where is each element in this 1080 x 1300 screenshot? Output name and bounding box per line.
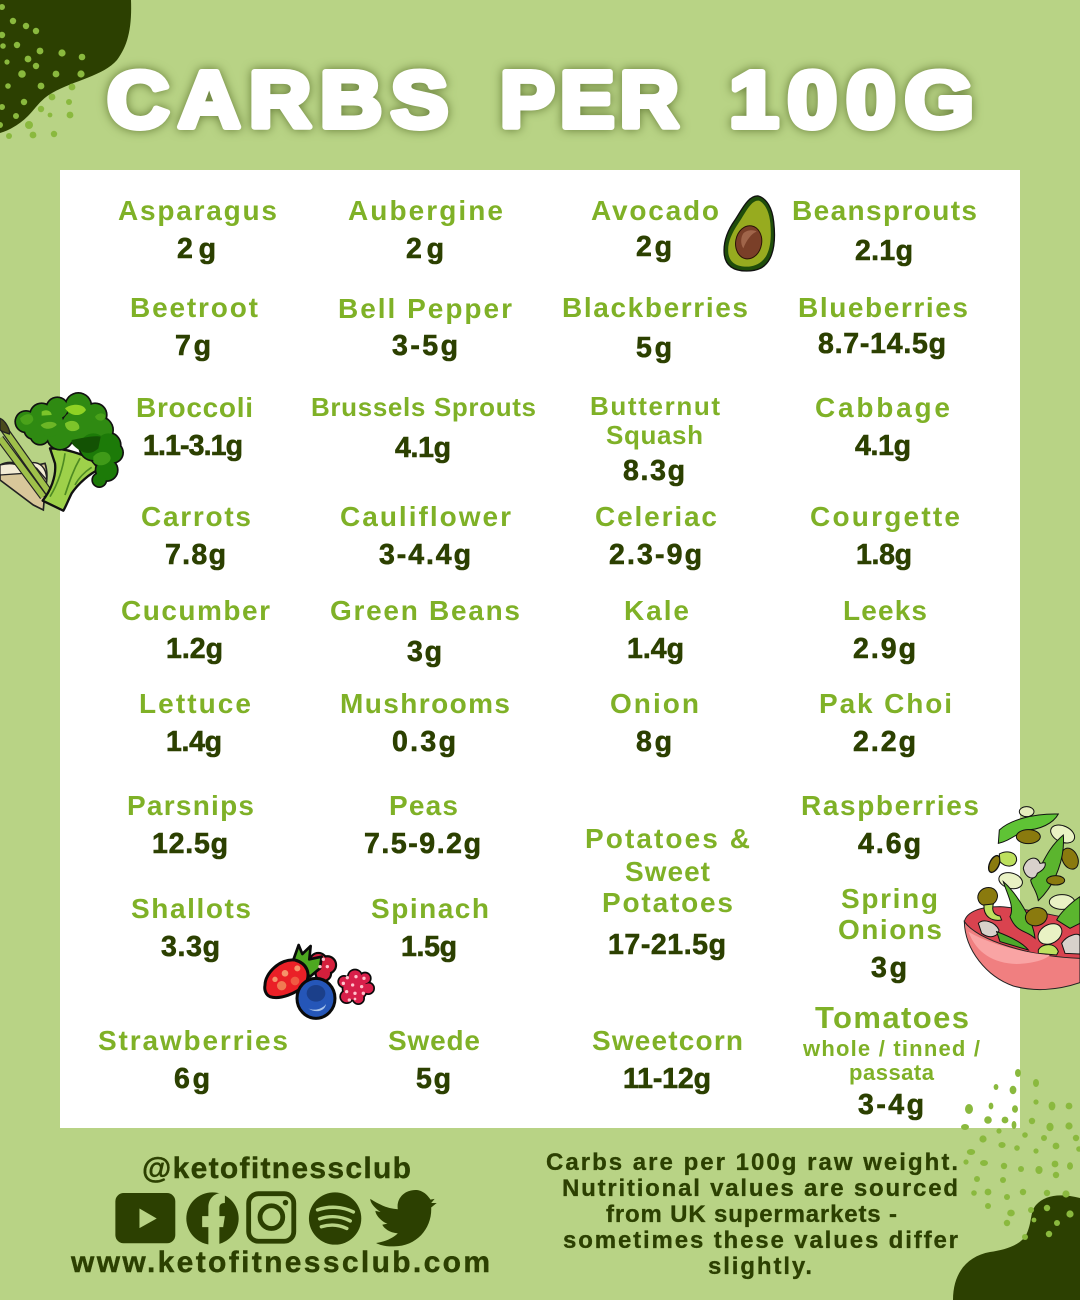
item: Bell Pepper bbox=[338, 293, 512, 362]
item: Swede: 5g bbox=[416, 1063, 451, 1095]
item: Pak Choi: Pak Choi bbox=[819, 688, 952, 719]
item: Celeriac: Celeriac bbox=[595, 501, 717, 532]
item: Beansprouts: 2.1g bbox=[855, 235, 913, 267]
note: source of values: slightly. bbox=[708, 1253, 812, 1280]
item: Brussels Sprouts: 4.1g bbox=[395, 432, 451, 464]
item: Kale: Kale bbox=[624, 595, 689, 626]
item: Lettuce: 1.4g bbox=[166, 726, 222, 758]
item: Bell Pepper: 3-5g bbox=[392, 330, 458, 362]
item: Kale: 1.4g bbox=[627, 633, 684, 665]
icon: broccoli with asparagus and mushrooms bbox=[0, 392, 124, 511]
item: Parsnips: 12.5g bbox=[152, 828, 228, 860]
icon: mixed berries bbox=[265, 945, 375, 1018]
item: Broccoli: Broccoli bbox=[136, 392, 253, 423]
item: Aubergine: 2g bbox=[406, 233, 444, 265]
item: Spring Onions: 3g bbox=[871, 952, 907, 984]
item: Cabbage: Cabbage bbox=[815, 392, 950, 423]
item: Avocado: Avocado bbox=[591, 195, 719, 226]
item: Avocado: 2g bbox=[636, 231, 672, 263]
item: Spring Onions: Spring bbox=[841, 883, 938, 914]
item: Sweetcorn: 11-12g bbox=[623, 1063, 711, 1095]
icon: facebook bbox=[186, 1192, 239, 1246]
item: Kale bbox=[624, 595, 689, 665]
item: Shallots bbox=[131, 893, 251, 963]
icon: avocado bbox=[724, 196, 774, 271]
item: Green Beans: Green Beans bbox=[330, 595, 520, 626]
item: Beetroot: 7g bbox=[175, 330, 211, 362]
item: Tomatoes: passata bbox=[849, 1060, 935, 1085]
item: Mushrooms: 0.3g bbox=[392, 726, 456, 758]
item: Shallots: Shallots bbox=[131, 893, 251, 924]
item: Sweetcorn: Sweetcorn bbox=[592, 1025, 743, 1056]
icon: instagram bbox=[249, 1194, 294, 1241]
item: Courgette bbox=[810, 501, 960, 571]
title: 100G bbox=[729, 55, 983, 144]
item: Courgette: Courgette bbox=[810, 501, 960, 532]
item: Broccoli bbox=[136, 392, 253, 462]
item: Brussels Sprouts: Brussels Sprouts bbox=[311, 392, 536, 422]
item: Aubergine bbox=[348, 195, 503, 265]
item: Avocado bbox=[591, 195, 719, 263]
item: Peas bbox=[364, 790, 481, 860]
item: Leeks: Leeks bbox=[843, 595, 927, 626]
item: Potatoes and Sweet Potatoes: 17-21.5g bbox=[608, 929, 726, 961]
item: Potatoes and Sweet Potatoes bbox=[585, 823, 750, 961]
item: Asparagus: 2g bbox=[177, 233, 216, 265]
item: Strawberries: Strawberries bbox=[98, 1025, 288, 1056]
panel: white food list background bbox=[60, 170, 1020, 1128]
note: source of values: Nutritional values are sourced bbox=[562, 1175, 958, 1202]
item: Cauliflower bbox=[340, 501, 511, 571]
item: Spring Onions: Onions bbox=[838, 914, 942, 945]
icon: spotify bbox=[309, 1192, 361, 1245]
item: Beansprouts: Beansprouts bbox=[792, 195, 977, 226]
item: Cauliflower: Cauliflower bbox=[340, 501, 511, 532]
note: source of values: sometimes these values differ bbox=[563, 1227, 958, 1254]
item: Asparagus: Asparagus bbox=[118, 195, 277, 226]
item: Parsnips bbox=[127, 790, 254, 860]
item: Cucumber bbox=[121, 595, 270, 665]
item: Green Beans bbox=[330, 595, 520, 668]
item: Lettuce: Lettuce bbox=[139, 688, 251, 719]
item: Blueberries: 8.7-14.5g bbox=[818, 328, 946, 360]
item: Cucumber: Cucumber bbox=[121, 595, 270, 626]
website: www.ketofitnessclub.com bbox=[70, 1246, 490, 1279]
item: Potatoes and Sweet Potatoes: Sweet bbox=[625, 856, 710, 887]
item: Shallots: 3.3g bbox=[161, 931, 220, 963]
item: Blackberries: 5g bbox=[636, 332, 672, 364]
item: Pak Choi bbox=[819, 688, 952, 758]
item: Butternut Squash: Butternut bbox=[590, 391, 720, 421]
item: Celeriac bbox=[595, 501, 717, 571]
item: Potatoes and Sweet Potatoes: Potatoes & bbox=[585, 823, 750, 854]
item: Carrots bbox=[141, 501, 251, 571]
icon: youtube bbox=[115, 1193, 175, 1243]
item: Blackberries: Blackberries bbox=[562, 292, 748, 323]
item: Cucumber: 1.2g bbox=[166, 633, 223, 665]
item: Broccoli: 1.1-3.1g bbox=[143, 430, 243, 462]
decorative blob: top left bbox=[0, 0, 131, 139]
note: source of values: from UK supermarkets - bbox=[606, 1201, 897, 1228]
item: Bell Pepper: Bell Pepper bbox=[338, 293, 512, 324]
item: Beetroot: Beetroot bbox=[130, 292, 258, 323]
item: Onion: Onion bbox=[610, 688, 699, 719]
item: Onion bbox=[610, 688, 699, 758]
item: Green Beans: 3g bbox=[407, 636, 442, 668]
item: Cauliflower: 3-4.4g bbox=[379, 539, 471, 571]
item: Potatoes and Sweet Potatoes: Potatoes bbox=[602, 887, 733, 918]
decorative dots and blob: bottom right bbox=[953, 1069, 1080, 1300]
item: Celeriac: 2.3-9g bbox=[609, 539, 702, 571]
item: Mushrooms: Mushrooms bbox=[340, 688, 510, 719]
icon: twitter bbox=[370, 1190, 437, 1246]
item: Carrots: Carrots bbox=[141, 501, 251, 532]
note: source of values bbox=[546, 1149, 958, 1280]
item: Strawberries: 6g bbox=[174, 1063, 210, 1095]
item: Aubergine: Aubergine bbox=[348, 195, 503, 226]
item: Sweetcorn bbox=[592, 1025, 743, 1095]
item: Pak Choi: 2.2g bbox=[853, 726, 916, 758]
item: Spring Onions bbox=[838, 883, 942, 984]
item: Peas: Peas bbox=[389, 790, 458, 821]
item: Butternut Squash: Squash bbox=[606, 420, 703, 450]
item: Strawberries bbox=[98, 1025, 288, 1095]
item: Parsnips: Parsnips bbox=[127, 790, 254, 821]
item: Carrots: 7.8g bbox=[165, 539, 226, 571]
item: Swede bbox=[388, 1025, 480, 1095]
item: Brussels Sprouts bbox=[311, 392, 536, 464]
item: Tomatoes: 3-4g bbox=[858, 1089, 924, 1121]
item: Peas: 7.5-9.2g bbox=[364, 828, 481, 860]
title: CARBS bbox=[107, 55, 457, 144]
item: Beetroot bbox=[130, 292, 258, 362]
note: source of values: Carbs are per 100g raw weight. bbox=[546, 1149, 958, 1176]
item: Cabbage bbox=[815, 392, 950, 462]
item: Tomatoes: Tomatoes bbox=[815, 1000, 969, 1035]
item: Spinach bbox=[371, 893, 489, 963]
item: Beansprouts bbox=[792, 195, 977, 267]
item: Spinach: Spinach bbox=[371, 893, 489, 924]
item: Spinach: 1.5g bbox=[401, 931, 457, 963]
item: Blackberries bbox=[562, 292, 748, 364]
item: Raspberries bbox=[801, 790, 979, 860]
item: Onion: 8g bbox=[636, 726, 672, 758]
item: Cabbage: 4.1g bbox=[855, 430, 911, 462]
item: Tomatoes bbox=[802, 1000, 980, 1121]
title: PER bbox=[500, 55, 684, 144]
item: Raspberries: Raspberries bbox=[801, 790, 979, 821]
icon: salad bowl bbox=[964, 807, 1080, 990]
item: Blueberries bbox=[798, 292, 968, 360]
title bbox=[107, 55, 983, 144]
item: Mushrooms bbox=[340, 688, 510, 758]
item: Butternut Squash: 8.3g bbox=[623, 455, 685, 487]
item: Leeks: 2.9g bbox=[853, 633, 916, 665]
item: Swede: Swede bbox=[388, 1025, 480, 1056]
social handle: @ketofitnessclub bbox=[142, 1152, 411, 1185]
item: Raspberries: 4.6g bbox=[858, 828, 921, 860]
item: Asparagus bbox=[118, 195, 277, 265]
item: Blueberries: Blueberries bbox=[798, 292, 968, 323]
social icons bbox=[115, 1190, 437, 1246]
item: Leeks bbox=[843, 595, 927, 665]
item: Courgette: 1.8g bbox=[856, 539, 912, 571]
item: Lettuce bbox=[139, 688, 251, 758]
item: Butternut Squash bbox=[590, 391, 720, 487]
item: Tomatoes: whole / tinned / bbox=[802, 1036, 980, 1061]
